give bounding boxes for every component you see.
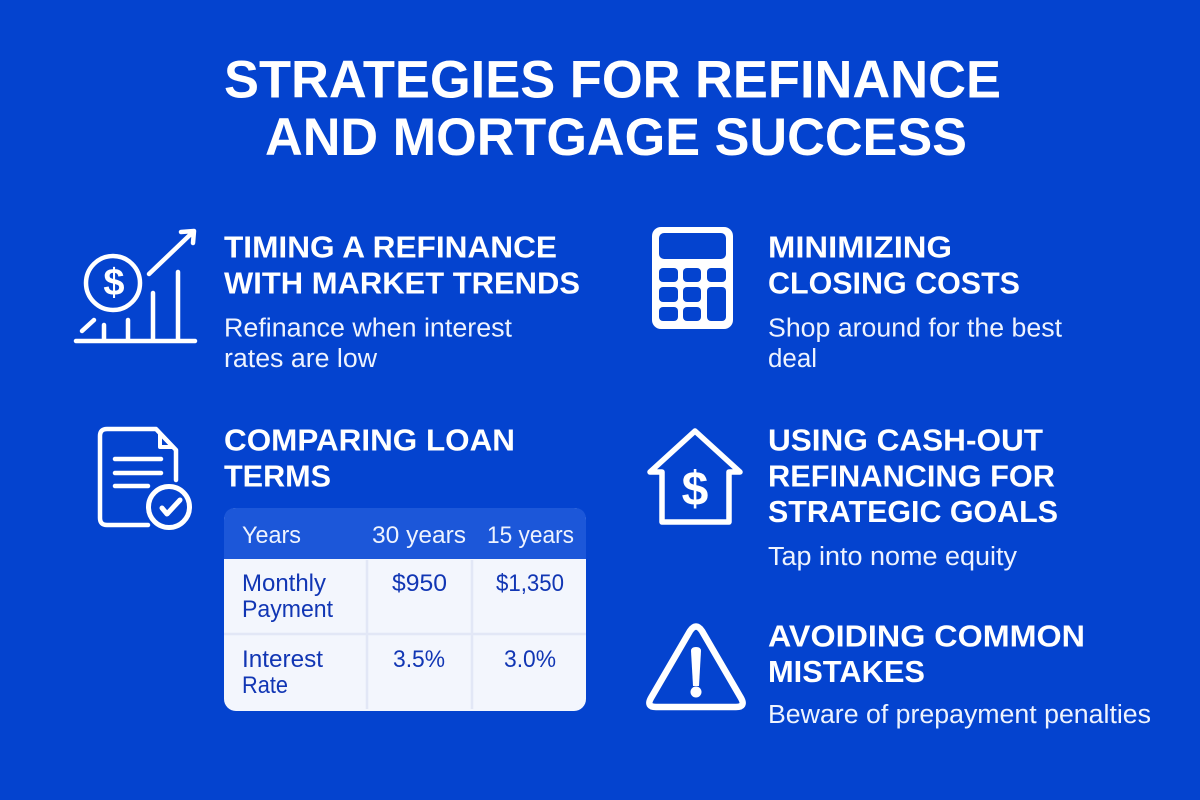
- icon: document with check: [100, 429, 190, 528]
- text block: Refinance when interest: [224, 314, 512, 342]
- text block: rates are low: [224, 345, 378, 373]
- table: loan terms comparison: [224, 508, 586, 711]
- icon: dollar coin and rising chart: $: [103, 262, 125, 304]
- icon: house with dollar: $: [682, 463, 709, 516]
- table: loan terms comparison: Interest: [242, 646, 323, 673]
- text block: [768, 314, 1062, 373]
- heading: [768, 422, 1058, 529]
- heading: [768, 230, 1020, 300]
- table: loan terms comparison: Payment: [242, 596, 333, 623]
- heading: COMPARING LOAN: [224, 422, 515, 458]
- panel: avoiding common mistakes: [649, 618, 1151, 729]
- text block: Beware of prepayment penalties: [768, 701, 1151, 729]
- heading: MINIMIZING: [768, 230, 952, 264]
- table: loan terms comparison: $1,350: [496, 570, 564, 597]
- table: loan terms comparison: Years: [242, 522, 301, 549]
- table: loan terms comparison: Monthly: [242, 570, 326, 597]
- icon: warning triangle: [649, 626, 743, 707]
- panel: comparing loan terms: [100, 422, 586, 711]
- text block: Tap into nome equity: [768, 543, 1017, 571]
- heading: MISTAKES: [768, 654, 925, 689]
- text block: Shop around for the best: [768, 314, 1062, 342]
- title: STRATEGIES FOR REFINANCE: [224, 50, 1001, 110]
- title: [224, 50, 1001, 167]
- text block: deal: [768, 345, 817, 373]
- panel: minimizing closing costs: [652, 227, 1062, 373]
- icon: calculator: [652, 227, 733, 329]
- table: loan terms comparison: 3.0%: [504, 646, 556, 673]
- table: loan terms comparison: 15 years: [487, 522, 574, 549]
- heading: STRATEGIC GOALS: [768, 494, 1058, 529]
- heading: REFINANCING FOR: [768, 458, 1055, 494]
- table: loan terms comparison: $950: [392, 570, 447, 597]
- icon: dollar coin and rising chart: [76, 231, 195, 341]
- heading: USING CASH-OUT: [768, 422, 1043, 458]
- panel: cash-out refinancing: [650, 422, 1058, 571]
- heading: TIMING A REFINANCE: [224, 230, 557, 264]
- heading: AVOIDING COMMON: [768, 618, 1085, 654]
- table: loan terms comparison: Rate: [242, 672, 288, 699]
- heading: [768, 618, 1085, 689]
- heading: [224, 230, 580, 300]
- panel: timing a refinance: [76, 230, 580, 373]
- heading: WITH MARKET TRENDS: [224, 266, 580, 300]
- table: loan terms comparison: 30 years: [372, 522, 466, 549]
- heading: TERMS: [224, 458, 331, 494]
- text block: [224, 314, 512, 373]
- title: AND MORTGAGE SUCCESS: [265, 108, 967, 167]
- heading: [224, 422, 515, 494]
- icon: house with dollar: [650, 431, 740, 522]
- table: loan terms comparison: 3.5%: [393, 646, 445, 673]
- heading: CLOSING COSTS: [768, 266, 1020, 300]
